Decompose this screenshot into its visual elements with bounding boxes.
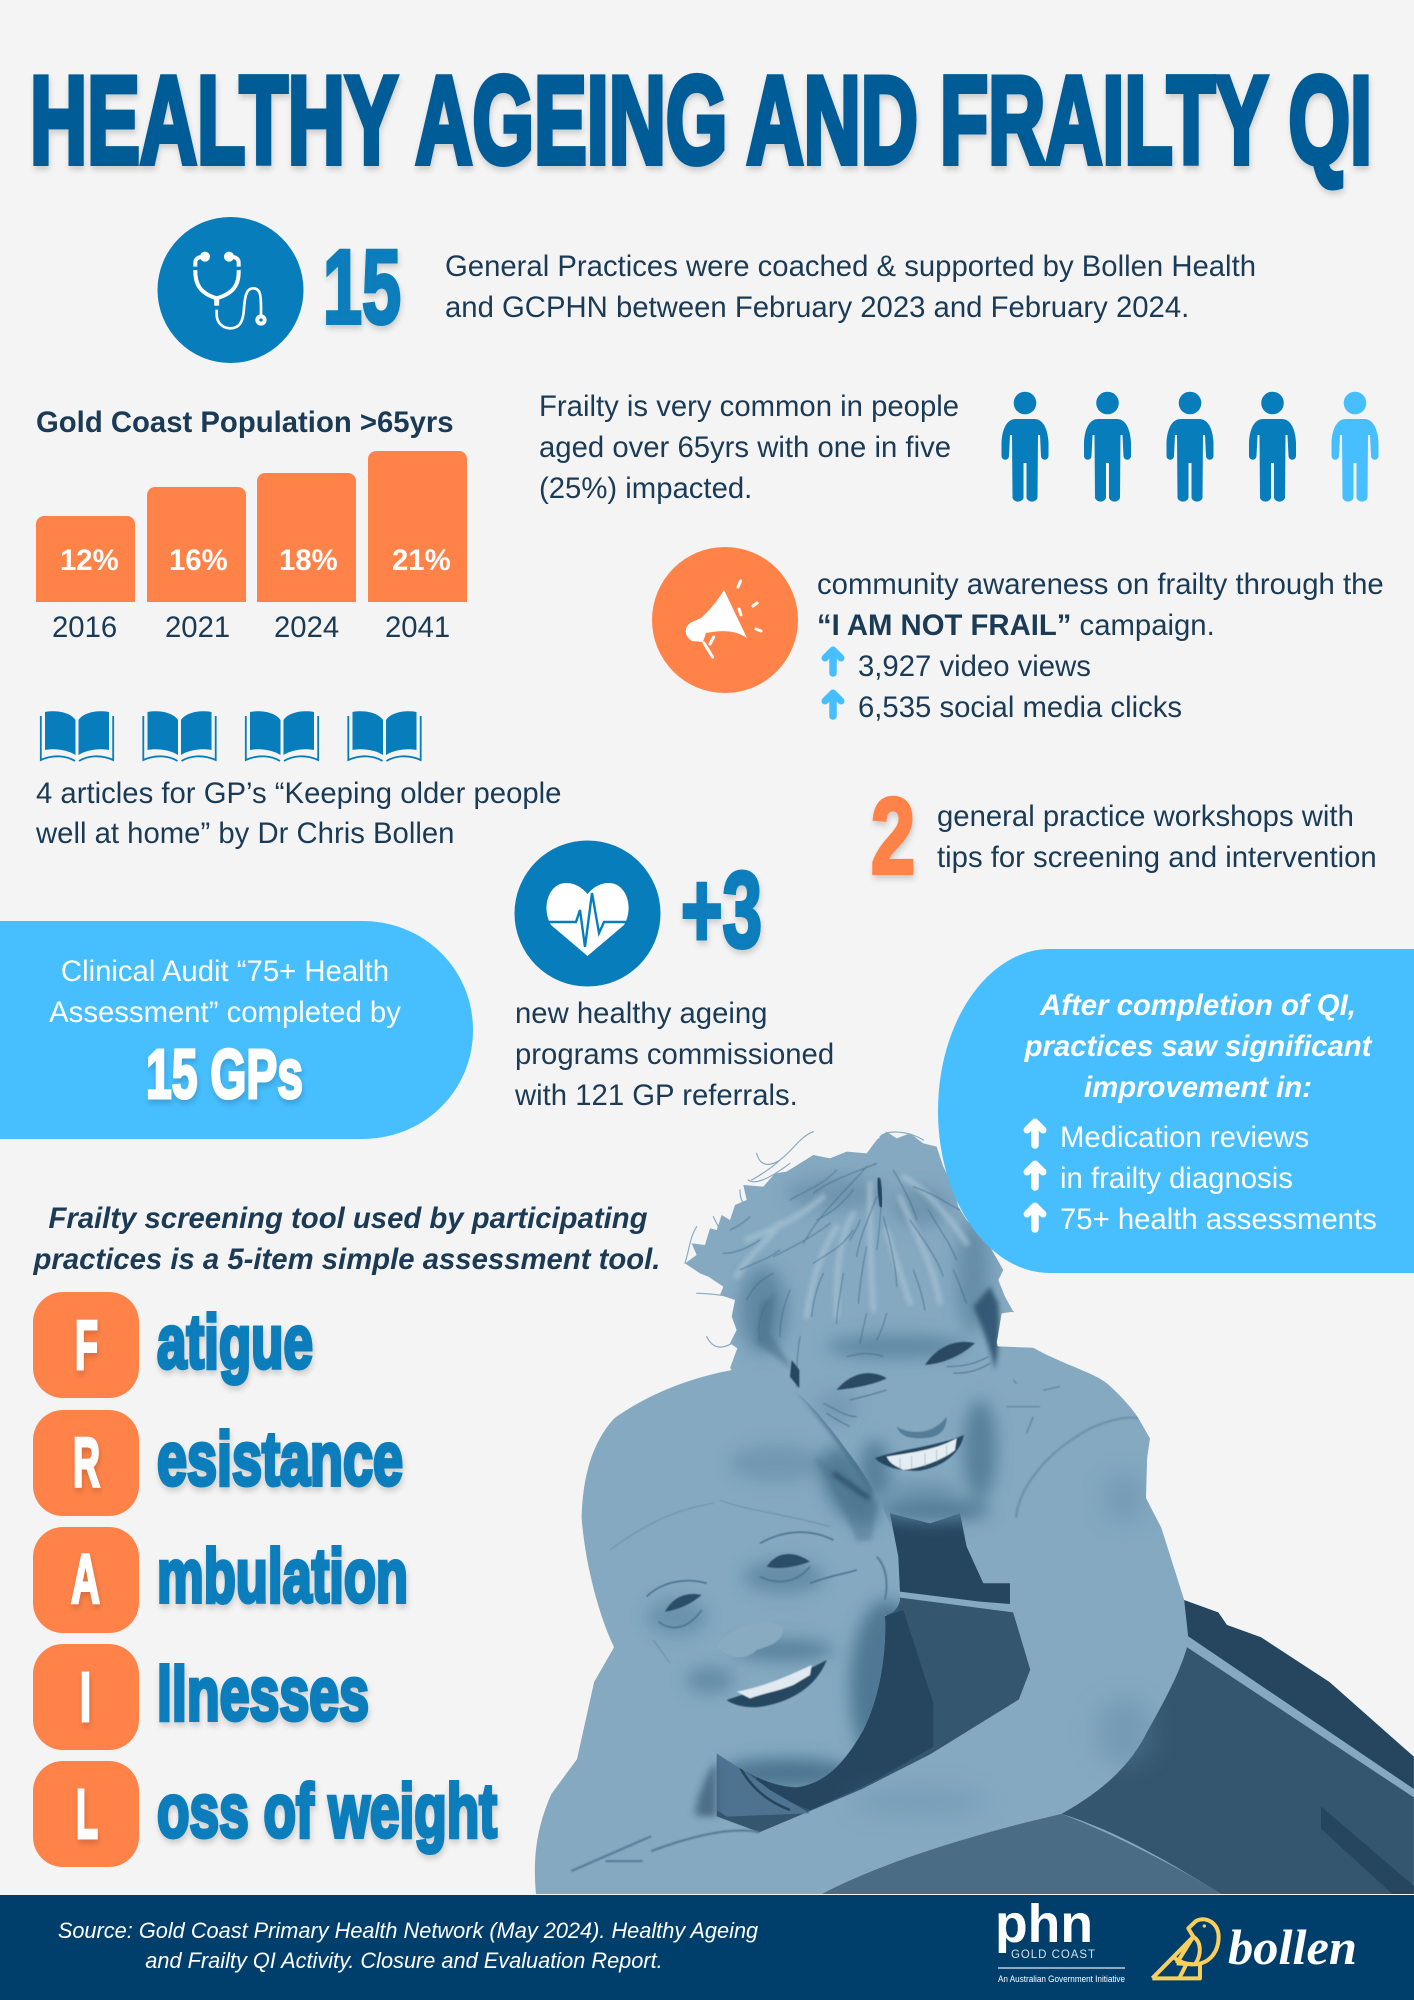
acronym words bbox=[157, 1300, 497, 1854]
woman's arm shading bbox=[571, 1418, 1153, 1871]
FRAIL acronym list bbox=[33, 1292, 497, 1867]
text: general practices coached bbox=[445, 250, 1256, 324]
number 2: 2 bbox=[871, 775, 915, 896]
text: community awareness: “I AM NOT FRAIL” campaign. bbox=[817, 609, 1215, 642]
text: articles for GPs: well at home” by Dr Chris Bollen bbox=[35, 817, 454, 850]
bars bbox=[36, 451, 467, 602]
improvement list: Medication reviews bbox=[1060, 1121, 1309, 1154]
tile letters bbox=[71, 1306, 100, 1853]
heading: frailty screening tool: Frailty screening tool used by participating bbox=[48, 1202, 648, 1235]
logo: PHN Gold Coast: GOLD COAST bbox=[1011, 1949, 1095, 1961]
text: frailty one in five bbox=[539, 390, 959, 505]
icon: five people pictogram bbox=[1002, 392, 1378, 502]
text: community awareness: 6,535 social media clicks bbox=[858, 691, 1182, 724]
bar values: 18% bbox=[279, 544, 338, 577]
man's shirt and back bbox=[717, 1598, 1414, 1894]
text: workshops: general practice workshops with bbox=[937, 800, 1354, 833]
bar values: 16% bbox=[169, 544, 228, 577]
tile letters: F bbox=[75, 1306, 98, 1384]
improvement list: in frailty diagnosis bbox=[1060, 1162, 1293, 1195]
audit text: Assessment” completed by bbox=[49, 996, 401, 1029]
improvement heading: improvement in: bbox=[1084, 1071, 1312, 1104]
heading: frailty screening tool: practices is a 5-item simple assessment tool. bbox=[33, 1243, 660, 1276]
text: community awareness bbox=[817, 568, 1384, 724]
woman's dress between the couple bbox=[717, 1513, 1010, 1817]
icon: heart with pulse bbox=[514, 840, 660, 986]
acronym words: llnesses bbox=[157, 1652, 369, 1737]
photo: smiling older couple bbox=[520, 1120, 1414, 1900]
15 GPs: 15 GPs bbox=[146, 1035, 303, 1113]
articles section bbox=[35, 711, 561, 850]
improvement heading: After completion of QI, bbox=[1039, 989, 1356, 1022]
chart heading: Gold Coast Population >65yrs bbox=[36, 406, 454, 439]
text: articles for GPs bbox=[35, 777, 561, 850]
panel: clinical audit bbox=[0, 921, 473, 1139]
year labels: 2016 bbox=[52, 611, 117, 644]
text: new programs: programs commissioned bbox=[515, 1038, 834, 1071]
text: community awareness: community awareness on frailty through the bbox=[817, 568, 1384, 601]
improvement list bbox=[1060, 1121, 1377, 1236]
acronym words: esistance bbox=[157, 1417, 403, 1502]
acronym words: mbulation bbox=[157, 1534, 408, 1619]
flyaway hair strands bbox=[685, 1132, 1013, 1347]
number +3: +3 bbox=[681, 849, 762, 970]
logo: Bollen bird: bollen bbox=[1228, 1919, 1357, 1975]
tile letters: A bbox=[71, 1540, 100, 1618]
improvement list: 75+ health assessments bbox=[1060, 1203, 1377, 1236]
text: new programs: with 121 GP referrals. bbox=[514, 1079, 798, 1112]
year labels: 2021 bbox=[165, 611, 230, 644]
new programs section bbox=[514, 840, 834, 1112]
source citation bbox=[58, 1918, 758, 1973]
bar values bbox=[60, 544, 451, 577]
icon: megaphone bbox=[652, 547, 798, 693]
improvement heading bbox=[1024, 989, 1373, 1104]
source citation: Source: Gold Coast Primary Health Network (May 2024). Healthy Ageing bbox=[58, 1918, 758, 1943]
logo: Bollen bird bbox=[1152, 1919, 1357, 1978]
footer band bbox=[0, 1894, 1414, 2000]
year labels: 2024 bbox=[274, 611, 339, 644]
tile letters: I bbox=[80, 1658, 91, 1736]
source citation: and Frailty QI Activity. Closure and Evaluation Report. bbox=[145, 1948, 663, 1973]
audit text: Clinical Audit “75+ Health bbox=[61, 955, 389, 988]
logo: PHN Gold Coast: An Australian Government Initiative bbox=[998, 1974, 1125, 1985]
text: workshops: tips for screening and intervention bbox=[937, 841, 1377, 874]
icon: white up arrows bbox=[1027, 1122, 1043, 1229]
icon: up arrows bbox=[825, 650, 841, 716]
text: general practices coached: and GCPHN between February 2023 and February 2024. bbox=[445, 291, 1189, 324]
text: new programs: new healthy ageing bbox=[515, 997, 767, 1030]
text: frailty one in five: Frailty is very common in people bbox=[539, 390, 959, 423]
number 15: 15 bbox=[323, 229, 401, 346]
text: frailty one in five: (25%) impacted. bbox=[539, 472, 752, 505]
bar chart: Gold Coast population over 65 bbox=[36, 406, 467, 644]
year labels: 2041 bbox=[385, 611, 450, 644]
improvement heading: practices saw significant bbox=[1024, 1030, 1373, 1063]
tile letters: L bbox=[76, 1775, 98, 1853]
logo: PHN Gold Coast bbox=[995, 1894, 1125, 1985]
logo: PHN Gold Coast: phn bbox=[995, 1894, 1093, 1954]
bar values: 12% bbox=[60, 544, 119, 577]
acronym words: atigue bbox=[157, 1300, 313, 1385]
panel: improvement after QI bbox=[938, 949, 1414, 1273]
bar values: 21% bbox=[392, 544, 451, 577]
text: workshops bbox=[937, 800, 1377, 874]
text: general practices coached: General Practices were coached & supported by Bollen Health bbox=[445, 250, 1256, 283]
text: frailty one in five: aged over 65yrs with one in five bbox=[539, 431, 951, 464]
man's head bbox=[610, 1394, 900, 1788]
text: new programs bbox=[514, 997, 834, 1112]
text: articles for GPs: 4 articles for GP’s “Keeping older people bbox=[36, 777, 561, 810]
tile letters: R bbox=[73, 1423, 100, 1501]
letter tiles bbox=[33, 1292, 139, 1867]
woman's hair and face bbox=[723, 1163, 1060, 1522]
acronym words: oss of weight bbox=[157, 1769, 497, 1854]
heading: frailty screening tool bbox=[33, 1202, 660, 1276]
workshops section bbox=[871, 775, 1377, 896]
text: community awareness: 3,927 video views bbox=[858, 650, 1091, 683]
year labels bbox=[52, 611, 450, 644]
audit text bbox=[49, 955, 401, 1029]
stat: 15 general practices bbox=[158, 217, 1256, 363]
campaign section bbox=[652, 547, 1384, 724]
icon: stethoscope bbox=[158, 217, 304, 363]
icon: four open books bbox=[41, 711, 421, 761]
